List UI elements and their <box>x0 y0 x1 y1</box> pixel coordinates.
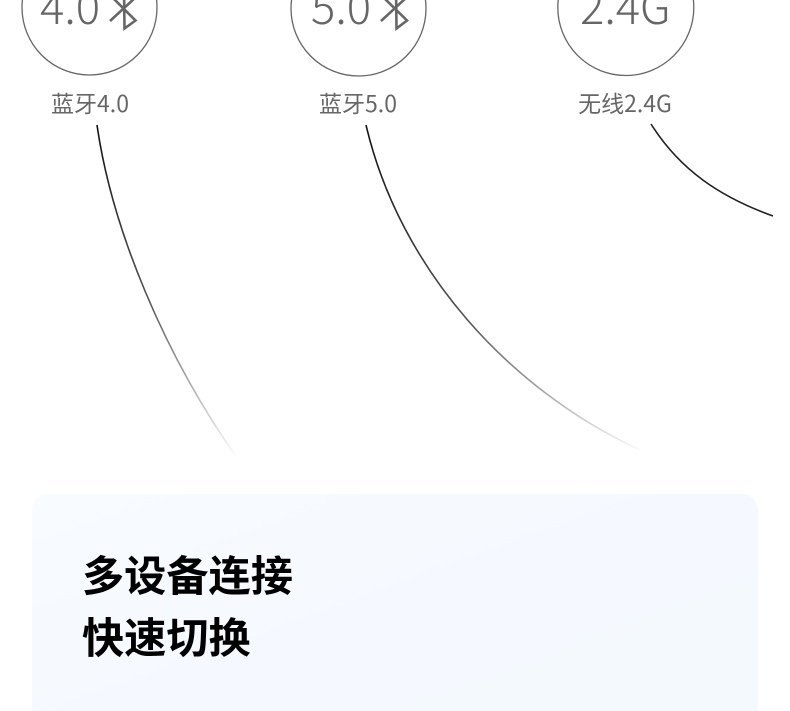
curve: bluetooth 5.0 line <box>366 125 640 450</box>
icon: wireless 2.4G badge <box>558 0 694 76</box>
label: bluetooth 4.0: 蓝牙4.0 <box>51 85 129 119</box>
icon: bluetooth 4.0 badge <box>22 0 157 75</box>
heading: line two: 快速切换 <box>82 605 251 666</box>
curve: wireless 2.4G line <box>651 124 773 216</box>
label: bluetooth 5.0: 蓝牙5.0 <box>319 85 397 119</box>
heading: line one: 多设备连接 <box>82 543 293 604</box>
icon: bluetooth 5.0 badge <box>291 0 426 76</box>
curve: bluetooth 4.0 line <box>97 125 235 455</box>
panel: multi-device background <box>32 494 758 711</box>
label: wireless 2.4G: 无线2.4G <box>578 85 672 119</box>
